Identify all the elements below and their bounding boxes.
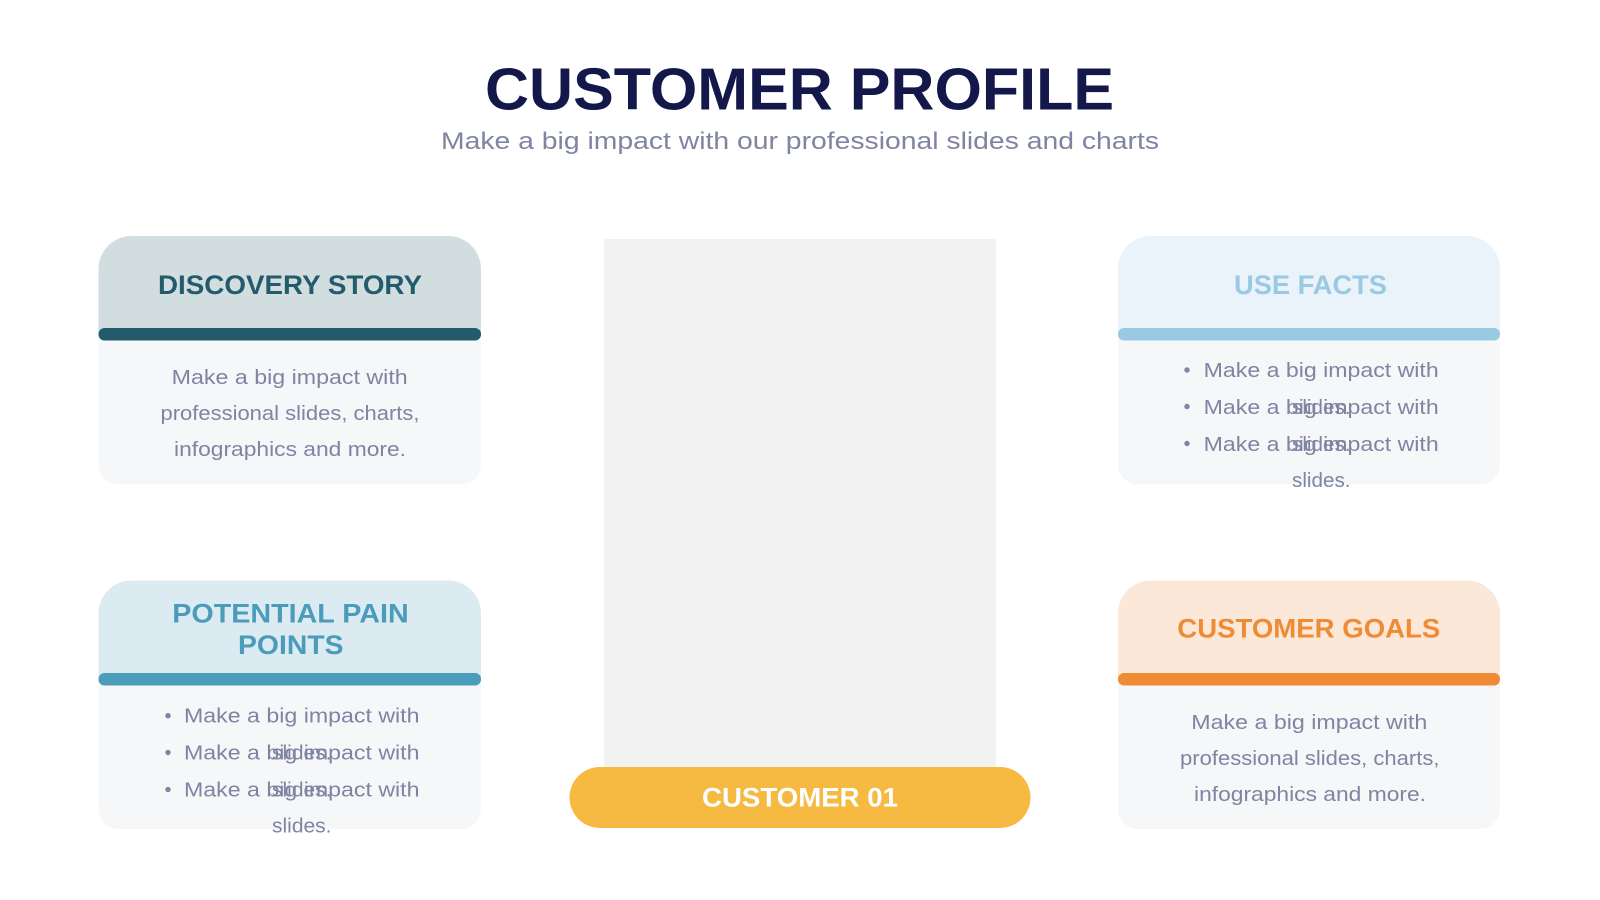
bullet list: Make a big impact with [184,778,420,801]
card header [1118,580,1500,678]
bullet list: slides. [1292,433,1350,456]
customer name pill [570,767,1030,828]
body text: infographics and more. [174,438,406,461]
card body [1118,645,1500,829]
card header [98,236,481,333]
header bar [1118,673,1500,686]
header bar [98,328,481,340]
header bar [1118,328,1500,340]
customer photo placeholder [604,239,996,779]
panel: discovery story [98,236,481,484]
card body [98,645,481,829]
body text: professional slides, charts, [1180,747,1440,770]
bullet list: slides. [272,741,332,764]
heading [172,598,409,660]
bullet list: slides. [272,815,332,838]
panel: use facts [1118,236,1500,492]
subtitle: Make a big impact with our professional slides and charts [441,128,1159,155]
bullet list: slides. [1292,469,1350,492]
bullet list [165,705,420,838]
body text [1180,711,1440,806]
bullet list: Make a big impact with [184,741,420,764]
bullet list: Make a big impact with [1204,359,1439,382]
bullet list: slides. [272,778,332,801]
bullet list [1184,359,1439,492]
card header [98,580,481,678]
card body [98,300,481,484]
title: CUSTOMER PROFILE [485,56,1114,122]
body text [160,366,420,461]
header bar [98,673,481,686]
heading: CUSTOMER GOALS [1177,614,1440,644]
bullet list: Make a big impact with [1204,396,1439,419]
panel: potential pain points [98,580,481,838]
panel: customer goals [1118,580,1500,829]
heading: USE FACTS [1234,270,1387,300]
heading: POTENTIAL PAIN [172,598,409,628]
body text: professional slides, charts, [160,402,420,425]
bullet list: Make a big impact with [184,705,420,728]
bullet list: slides. [1292,396,1350,419]
customer name pill: CUSTOMER 01 [702,783,898,813]
heading: DISCOVERY STORY [158,270,422,300]
card header [1118,236,1500,333]
bullet list: Make a big impact with [1204,433,1439,456]
card body [1118,300,1500,484]
body text: infographics and more. [1194,783,1426,806]
heading: POINTS [238,630,344,660]
body text: Make a big impact with [1191,711,1427,734]
body text: Make a big impact with [172,366,408,389]
